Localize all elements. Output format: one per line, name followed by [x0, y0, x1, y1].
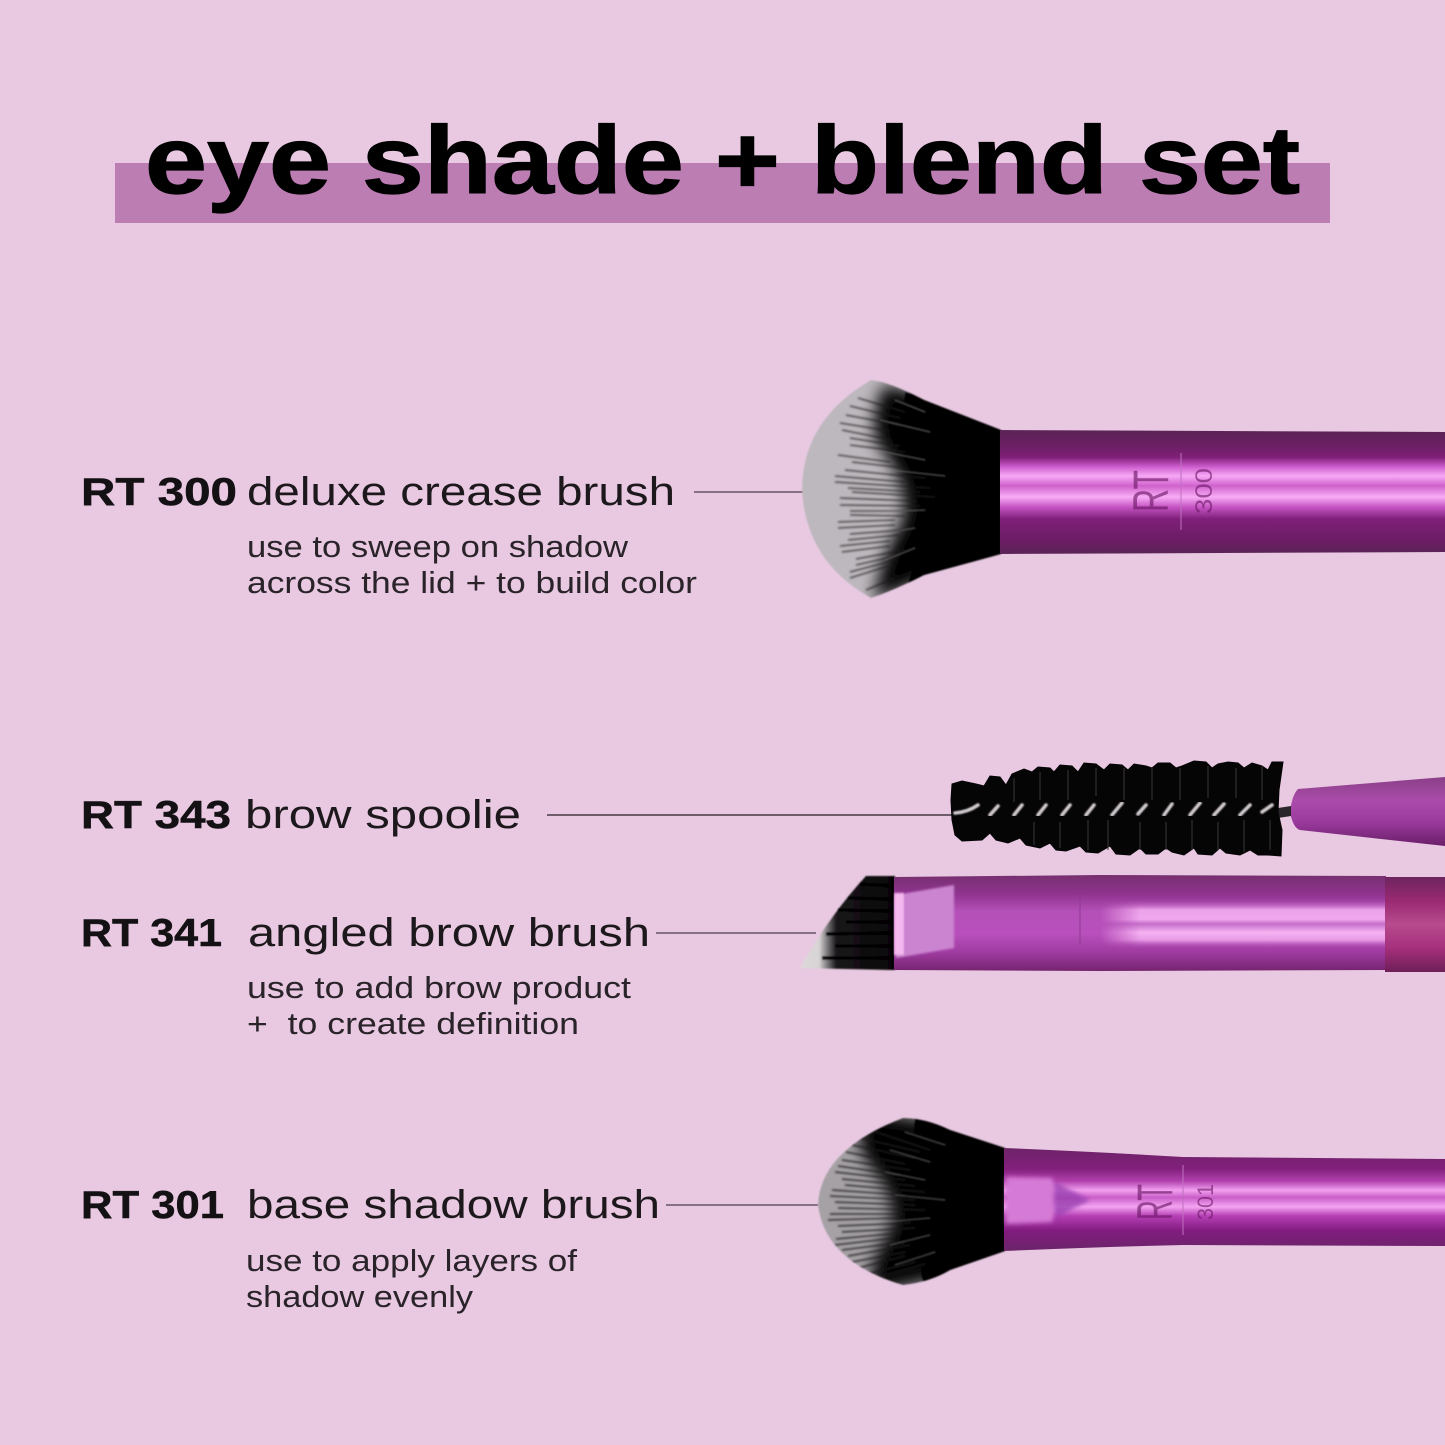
RT 301 description: shadow evenly [246, 1279, 474, 1314]
RT 341 code: RT 341 [81, 912, 222, 955]
RT 300 handle [1000, 430, 1445, 554]
RT 301 leader line [666, 1204, 818, 1206]
RT 341 description: use to add brow product [247, 970, 631, 1005]
panel: RT 300 label [81, 470, 697, 600]
panel: RT 301 label [81, 1183, 660, 1314]
spoolie bristles [951, 761, 1283, 856]
spoolie twisted wire [955, 803, 1272, 815]
panel: RT 343 label [81, 793, 521, 837]
RT 341 name: angled brow brush [248, 911, 650, 955]
RT 300 name: deluxe crease brush [247, 470, 675, 514]
RT 301 description: use to apply layers of [246, 1243, 577, 1278]
RT 300 leader line [694, 491, 803, 493]
title text: eye shade + blend set [145, 107, 1300, 214]
brush: RT 300 deluxe crease brush [802, 380, 1445, 600]
RT 301 bristles [818, 1112, 1005, 1292]
RT 343 leader line [547, 814, 952, 816]
RT 341 leader line [656, 932, 816, 934]
RT 301 description [246, 1243, 577, 1314]
panel: RT 341 label [81, 911, 650, 1041]
RT 343 name: brow spoolie [245, 793, 521, 837]
spoolie wire tip [1278, 806, 1291, 818]
RT 300 description: across the lid + to build color [247, 565, 697, 600]
brush: RT 343 brow spoolie [951, 761, 1445, 856]
RT 300 handle: 300 [1191, 468, 1218, 514]
RT 301 handle: 301 [1193, 1184, 1218, 1220]
title [115, 107, 1330, 223]
RT 300 bristles [802, 380, 1005, 600]
RT 341 description [247, 970, 631, 1041]
brush: RT 341 angled brow brush [800, 875, 1445, 972]
spoolie wand handle [1290, 777, 1445, 846]
RT 341 bristles [800, 876, 895, 970]
RT 343 code: RT 343 [81, 794, 231, 837]
brush: RT 301 base shadow brush [818, 1112, 1445, 1292]
RT 301 name: base shadow brush [247, 1183, 660, 1227]
RT 301 handle: RT [1127, 1184, 1183, 1220]
RT 300 description: use to sweep on shadow [247, 529, 629, 564]
RT 341 description: + to create definition [247, 1006, 579, 1041]
RT 341 handle [894, 875, 1386, 971]
RT 301 code: RT 301 [81, 1184, 224, 1227]
RT 300 handle: RT [1123, 470, 1179, 512]
RT 301 handle [1004, 1148, 1445, 1251]
title highlight band [115, 163, 1330, 223]
RT 300 code: RT 300 [81, 471, 237, 514]
RT 300 description [247, 529, 697, 600]
RT 341 magenta ferrule [1385, 877, 1445, 972]
